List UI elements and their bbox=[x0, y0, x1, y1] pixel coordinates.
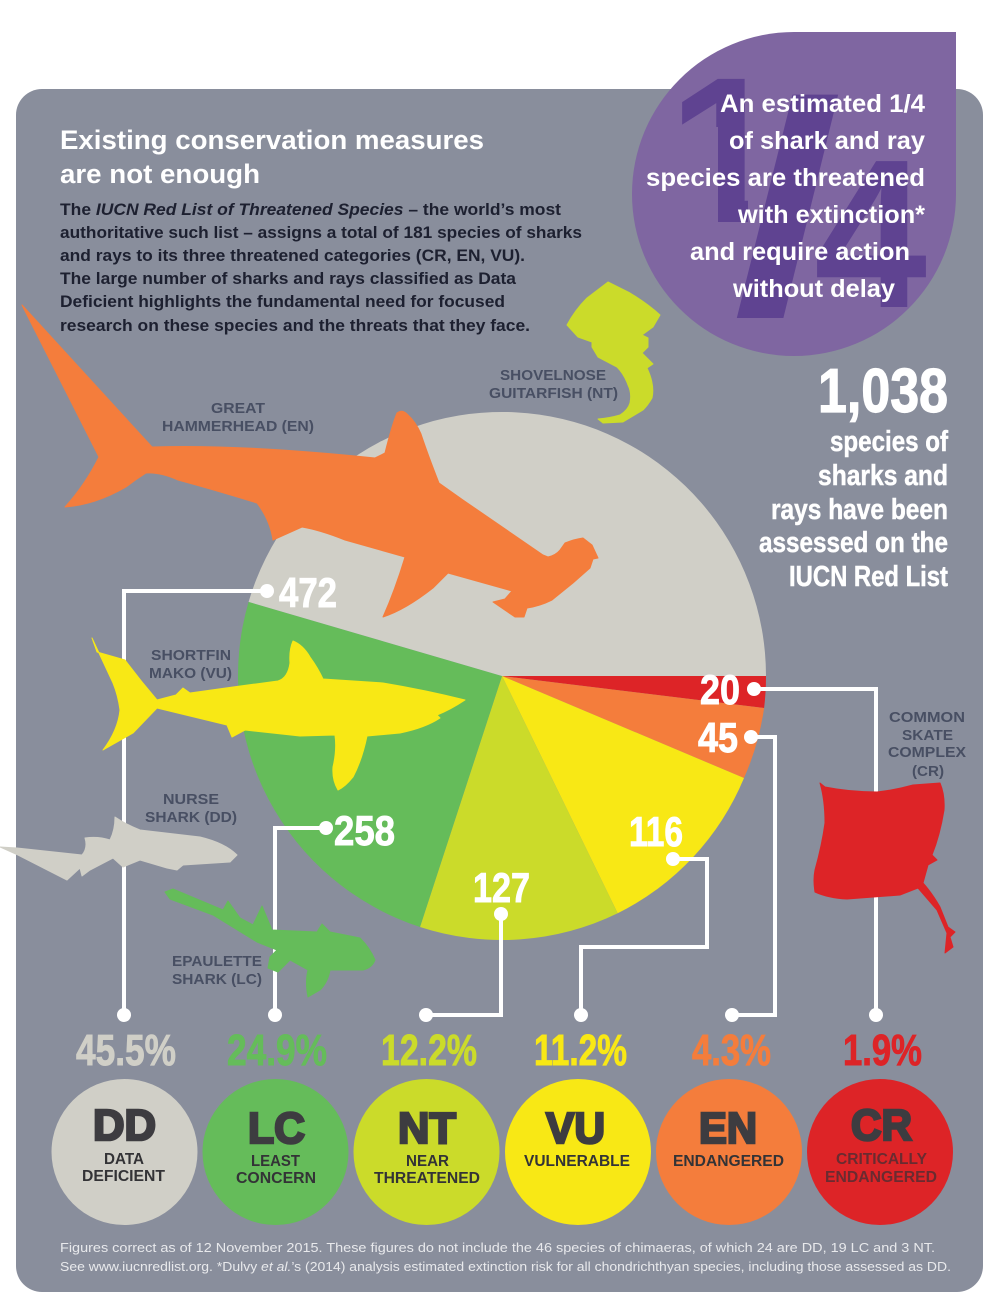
species labels: GREAT bbox=[211, 401, 265, 417]
statistic: 1,038 species assessed: IUCN Red List bbox=[789, 561, 948, 593]
large 1/4 numeral: 4 bbox=[814, 115, 927, 352]
category badge: least concern: CONCERN bbox=[236, 1170, 316, 1187]
callout text: with extinction* bbox=[737, 201, 925, 229]
percentage labels bbox=[76, 1026, 922, 1075]
intro paragraph: Deficient highlights the fundamental need for focused bbox=[60, 293, 505, 311]
callout text: An estimated 1/4 bbox=[720, 90, 925, 118]
category badge: near threatened: NT bbox=[398, 1104, 456, 1153]
intro paragraph: The IUCN Red List of Threatened Species – the world’s most bbox=[60, 201, 562, 219]
pie value labels: 116 bbox=[629, 808, 683, 855]
large 1/4 numeral: 1 bbox=[668, 35, 783, 267]
species labels: (CR) bbox=[912, 764, 944, 780]
pie value labels: 127 bbox=[473, 864, 530, 911]
shark: great hammerhead bbox=[22, 305, 598, 617]
species labels: SHARK (LC) bbox=[172, 972, 262, 988]
category badge: data deficient: DD bbox=[93, 1101, 156, 1150]
leader lines bbox=[117, 584, 883, 1022]
slice: near threatened bbox=[420, 676, 618, 940]
ray: shovelnose guitarfish bbox=[567, 282, 660, 423]
species labels bbox=[145, 368, 966, 988]
pie value labels: 20 bbox=[700, 666, 740, 713]
shark: epaulette shark bbox=[165, 889, 375, 997]
footnote bbox=[60, 1240, 951, 1274]
slice: critically endangered bbox=[502, 676, 766, 708]
statistic: 1,038 species assessed: assessed on the bbox=[759, 527, 948, 559]
category badge: endangered: EN bbox=[699, 1104, 757, 1153]
heading: are not enough bbox=[60, 159, 260, 189]
callout teardrop shape bbox=[632, 32, 956, 356]
callout text: of shark and ray bbox=[729, 127, 925, 155]
category badge: near threatened bbox=[354, 1079, 500, 1225]
shark: nurse shark bbox=[0, 817, 237, 880]
category badge: near threatened: THREATENED bbox=[374, 1170, 480, 1187]
species labels: SHOVELNOSE bbox=[500, 368, 606, 384]
pie value labels: 45 bbox=[698, 714, 738, 761]
large 1/4 numeral bbox=[682, 78, 926, 318]
species labels: GUITARFISH (NT) bbox=[489, 386, 618, 402]
category badge: endangered: ENDANGERED bbox=[673, 1153, 784, 1170]
species labels: SHARK (DD) bbox=[145, 810, 237, 826]
category badge: vulnerable: VU bbox=[546, 1104, 605, 1153]
pie value labels: 258 bbox=[334, 807, 395, 854]
statistic: 1,038 species assessed bbox=[759, 357, 948, 593]
species labels: SKATE bbox=[902, 728, 953, 744]
pie value labels: 472 bbox=[279, 569, 337, 616]
species labels: NURSE bbox=[163, 792, 219, 808]
category badge: least concern bbox=[202, 1079, 348, 1225]
callout text bbox=[646, 90, 925, 303]
category badge: critically endangered: CR bbox=[851, 1101, 912, 1150]
category badge: near threatened: NEAR bbox=[406, 1153, 449, 1170]
slice: vulnerable bbox=[502, 676, 744, 913]
percentage labels: 12.2% bbox=[381, 1026, 477, 1075]
percentage labels: 45.5% bbox=[76, 1026, 176, 1075]
heading: Existing conservation measures bbox=[60, 125, 484, 155]
purple callout: one quarter threatened bbox=[632, 32, 956, 376]
category badge: data deficient: DATA bbox=[104, 1151, 144, 1168]
species labels: MAKO (VU) bbox=[149, 666, 232, 682]
percentage labels: 1.9% bbox=[843, 1026, 922, 1075]
category badge: endangered bbox=[656, 1079, 802, 1225]
category badge: data deficient bbox=[52, 1079, 198, 1225]
slice: least concern bbox=[238, 602, 502, 927]
species labels: EPAULETTE bbox=[172, 954, 262, 970]
slice: endangered bbox=[502, 676, 764, 778]
statistic: 1,038 species assessed: sharks and bbox=[818, 460, 948, 492]
species labels: COMPLEX bbox=[888, 745, 966, 761]
callout text: without delay bbox=[732, 275, 895, 303]
category badge: critically endangered: ENDANGERED bbox=[825, 1169, 937, 1186]
intro paragraph: authoritative such list – assigns a total of 181 species of sharks bbox=[60, 224, 582, 242]
pie value labels bbox=[279, 569, 740, 911]
large 1/4 numeral: / bbox=[733, 40, 843, 376]
category badge: least concern: LC bbox=[248, 1104, 305, 1153]
statistic: 1,038 species assessed: rays have been bbox=[771, 494, 948, 526]
footnote: Figures correct as of 12 November 2015. These figures do not include the 46 species of chimaeras, of which 24 are DD, 19 LC and 3 NT. bbox=[60, 1240, 935, 1255]
ray: common skate complex bbox=[814, 783, 955, 953]
category badge: data deficient: DEFICIENT bbox=[82, 1168, 165, 1185]
heading bbox=[60, 125, 484, 189]
intro paragraph bbox=[60, 201, 582, 335]
shark: shortfin mako bbox=[92, 638, 465, 790]
percentage labels: 11.2% bbox=[534, 1026, 627, 1075]
percentage labels: 24.9% bbox=[227, 1026, 327, 1075]
pie chart bbox=[238, 412, 766, 940]
category badge: vulnerable: VULNERABLE bbox=[524, 1153, 630, 1170]
category badge: critically endangered: CRITICALLY bbox=[836, 1151, 927, 1168]
category badge: vulnerable bbox=[505, 1079, 651, 1225]
callout text: and require action bbox=[690, 238, 910, 266]
callout text: species are threatened bbox=[646, 164, 925, 192]
category badge: critically endangered bbox=[807, 1079, 953, 1225]
statistic: 1,038 species assessed: species of bbox=[830, 426, 948, 458]
percentage labels: 4.3% bbox=[692, 1026, 771, 1075]
intro paragraph: research on these species and the threats that they face. bbox=[60, 317, 530, 335]
statistic: 1,038 species assessed: 1,038 bbox=[818, 357, 948, 426]
category badge: least concern: LEAST bbox=[251, 1153, 300, 1170]
intro paragraph: and rays to its three threatened categories (CR, EN, VU). bbox=[60, 247, 525, 265]
footnote: See www.iucnredlist.org. *Dulvy et al.’s (2014) analysis estimated extinction risk for all chondrichthyan species, including those assessed as DD. bbox=[60, 1259, 951, 1274]
species labels: COMMON bbox=[889, 710, 965, 726]
species labels: HAMMERHEAD (EN) bbox=[162, 419, 314, 435]
slice: data deficient bbox=[249, 412, 766, 676]
intro paragraph: The large number of sharks and rays classified as Data bbox=[60, 270, 517, 288]
species labels: SHORTFIN bbox=[151, 648, 231, 664]
